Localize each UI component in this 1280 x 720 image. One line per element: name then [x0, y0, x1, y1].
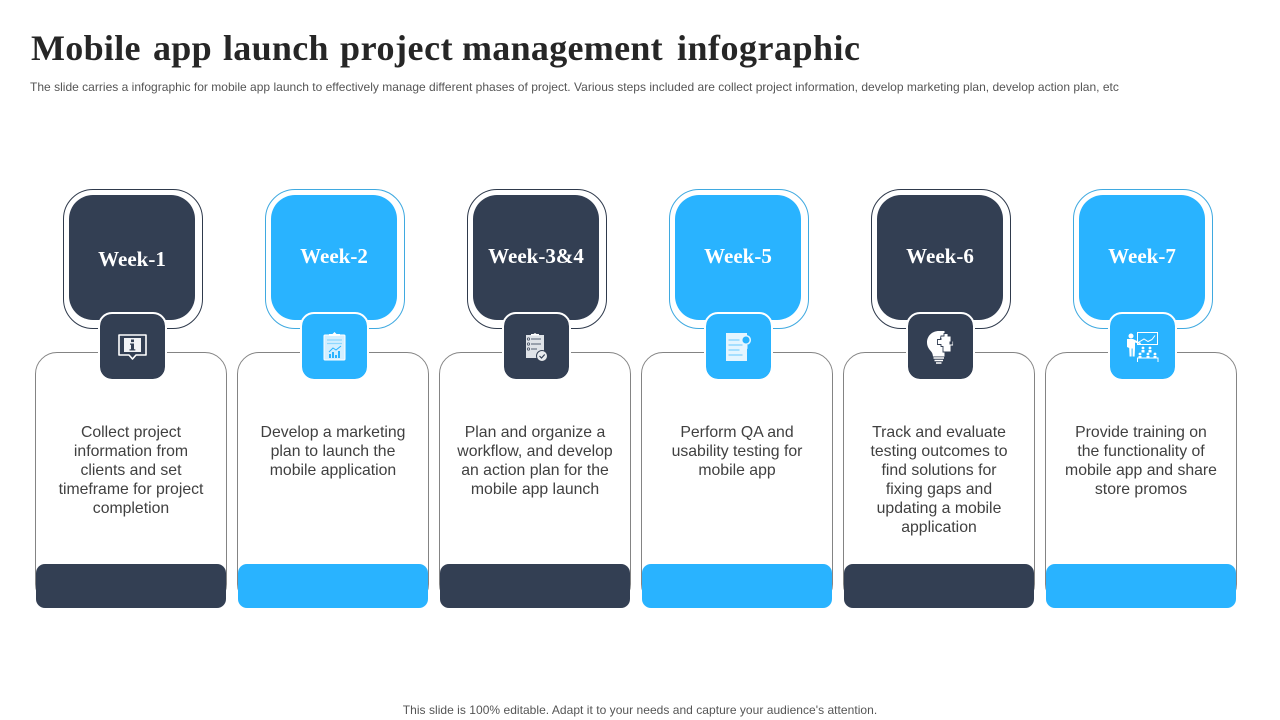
week 6 description: application	[901, 519, 977, 536]
week 1 description: timeframe for project	[59, 481, 203, 498]
panel: week 7	[1045, 189, 1237, 608]
week 2 footer bar	[238, 564, 428, 608]
weeks 3 and 4 description: Plan and organize a	[465, 424, 605, 441]
icon: checklist clipboard	[502, 312, 571, 381]
week 6 heading tile	[877, 195, 1003, 320]
title: infographic	[677, 28, 861, 68]
week 5 footer bar	[642, 564, 832, 608]
week 7 description: store promos	[1095, 481, 1187, 498]
week 5 description: mobile app	[698, 462, 776, 479]
week 2 card	[237, 352, 429, 606]
week 2 description	[261, 424, 405, 479]
panel: week 2	[237, 189, 429, 608]
weeks 3 and 4 label: Week-3&4	[488, 244, 584, 268]
week 6 description: Track and evaluate	[872, 424, 1006, 441]
week 5 heading tile	[675, 195, 801, 320]
week 5 description: usability testing for	[672, 443, 802, 460]
weeks 3 and 4 description: an action plan for the	[461, 462, 609, 479]
title: Mobile	[31, 28, 141, 68]
week 1 description: Collect project	[81, 424, 181, 441]
panel: week 5	[641, 189, 833, 608]
week 6 card	[843, 352, 1035, 606]
icon: light bulb with puzzle piece	[906, 312, 975, 381]
week 7 description: Provide training on	[1075, 424, 1207, 441]
week 5 description: Perform QA and	[680, 424, 794, 441]
panel: week 1	[35, 189, 227, 608]
week 7 description	[1065, 424, 1217, 498]
title: management	[462, 28, 663, 68]
icon: information speech bubble	[98, 312, 167, 381]
panel: week 6	[843, 189, 1035, 608]
week 1 description: clients and set	[80, 462, 181, 479]
footer note: This slide is 100% editable. Adapt it to your needs and capture your audience's attention.	[403, 703, 877, 717]
week 6 label: Week-6	[906, 244, 974, 268]
week 5 label: Week-5	[704, 244, 772, 268]
week 1 heading tile	[69, 195, 195, 320]
week 6 description	[870, 424, 1007, 536]
week 7 card	[1045, 352, 1237, 606]
week 6 description: fixing gaps and	[886, 481, 992, 498]
week 2 description: mobile application	[270, 462, 396, 479]
week 6 description: testing outcomes to	[870, 443, 1007, 460]
week 7 description: mobile app and share	[1065, 462, 1217, 479]
week 7 footer bar	[1046, 564, 1236, 608]
week 7 heading tile	[1079, 195, 1205, 320]
week 2 heading tile	[271, 195, 397, 320]
week 5 card	[641, 352, 833, 606]
week 6 description: updating a mobile	[877, 500, 1001, 517]
week 6 footer bar	[844, 564, 1034, 608]
title: app	[153, 28, 212, 68]
week 1 description: information from	[74, 443, 188, 460]
title: launch	[223, 28, 329, 68]
panel: weeks 3 and 4	[439, 189, 631, 608]
week 2 description: Develop a marketing	[261, 424, 405, 441]
weeks 3 and 4 description	[457, 424, 613, 498]
icon: presenter with audience	[1108, 312, 1177, 381]
week 1 card	[35, 352, 227, 606]
weeks 3 and 4 footer bar	[440, 564, 630, 608]
week 1 label: Week-1	[98, 247, 166, 271]
week 2 label: Week-2	[300, 244, 368, 268]
week 1 description	[58, 424, 204, 517]
weeks 3 and 4 description: workflow, and develop	[457, 443, 613, 460]
icon: certified document	[704, 312, 773, 381]
weeks 3 and 4 description: mobile app launch	[471, 481, 599, 498]
weeks 3 and 4 card	[439, 352, 631, 606]
week 7 label: Week-7	[1108, 244, 1176, 268]
weeks 3 and 4 heading tile	[473, 195, 599, 320]
week 2 description: plan to launch the	[271, 443, 395, 460]
week 7 description: the functionality of	[1077, 443, 1205, 460]
title: project	[340, 28, 453, 68]
week 1 footer bar	[36, 564, 226, 608]
week 5 description	[672, 424, 802, 479]
week 6 description: find solutions for	[881, 462, 997, 479]
title	[31, 28, 861, 68]
week 1 description: completion	[93, 500, 169, 517]
subtitle: The slide carries a infographic for mobile app launch to effectively manage different phases of project. Various steps included are collect project information, develop marketing plan, develop action plan, etc	[30, 80, 1119, 94]
icon: clipboard with chart	[300, 312, 369, 381]
